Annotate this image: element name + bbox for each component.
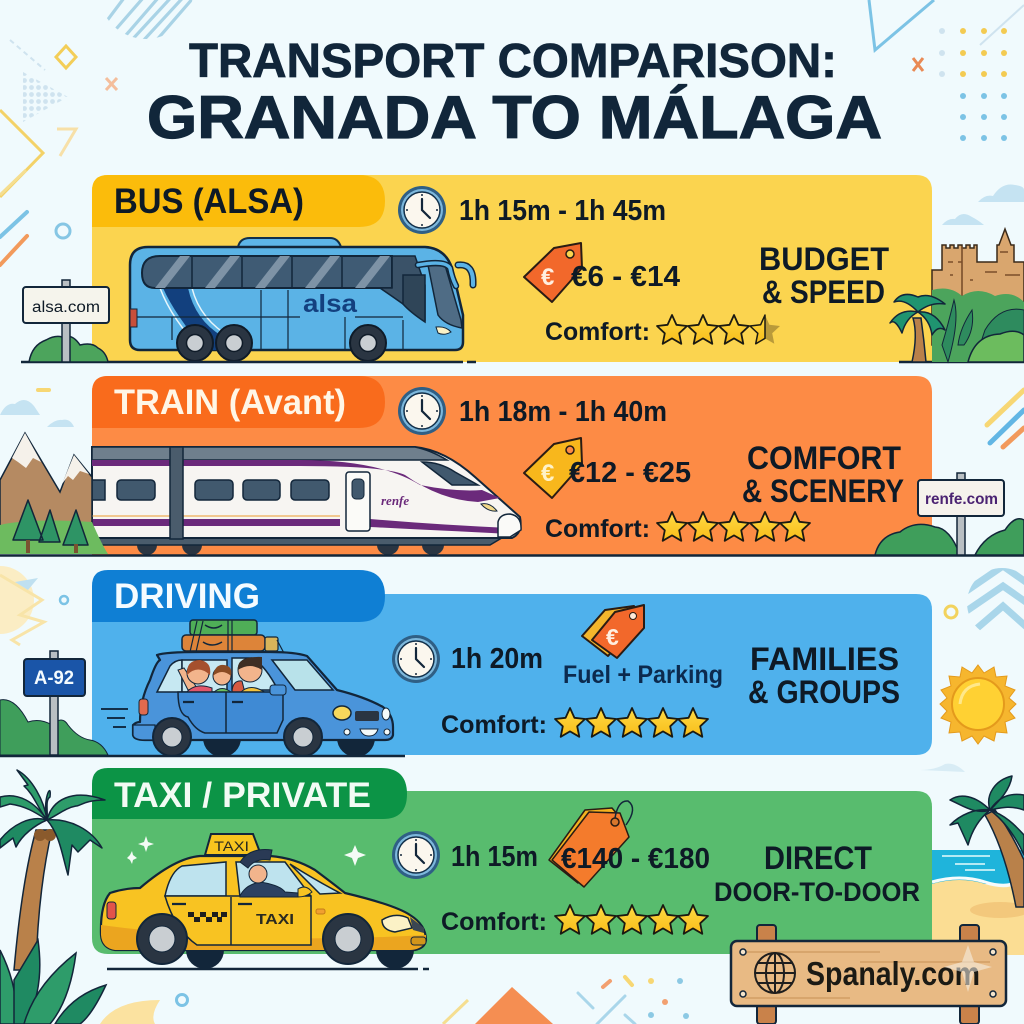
train illustration: renfe (381, 493, 409, 508)
header: driving: DRIVING (114, 577, 260, 616)
best for: & SCENERY (742, 473, 904, 509)
header: driving (92, 570, 385, 622)
decorative shapes: bottom (176, 977, 689, 1024)
scenery: bottom-left leaves (0, 940, 160, 1024)
best for: DIRECT (764, 840, 872, 876)
bus illustration: alsa (303, 290, 358, 318)
clouds: left (0, 388, 74, 427)
best for: DOOR-TO-DOOR (714, 877, 920, 907)
panel background (92, 791, 932, 954)
taxi illustration: TAXI (214, 838, 249, 854)
icon: clock (398, 186, 446, 234)
panel: taxi (92, 768, 932, 954)
duration: 1h 18m - 1h 40m (459, 396, 667, 428)
road sign: alsa.com: alsa.com (32, 299, 100, 316)
decorative shapes: top left (0, 0, 200, 265)
duration: 1h 15m (451, 841, 538, 873)
header: train (92, 376, 385, 428)
comfort rating (545, 315, 780, 346)
icon: price tags (582, 605, 644, 658)
bus illustration (130, 238, 473, 361)
taxi illustration (101, 834, 426, 969)
panel background (92, 594, 932, 755)
title: GRANADA TO MÁLAGA (147, 84, 882, 151)
comfort rating (441, 708, 708, 739)
ground line: bus (21, 361, 1024, 363)
icon: globe (755, 953, 795, 993)
sparkle (944, 945, 992, 992)
header: taxi (92, 768, 407, 819)
price: €6 - €14 (571, 261, 680, 293)
ground line: train (0, 554, 1024, 557)
best for: & SPEED (762, 274, 885, 310)
train illustration (92, 447, 521, 555)
panel: train (92, 376, 932, 555)
taxi illustration: TAXI (256, 911, 294, 928)
icon: clock (398, 387, 446, 435)
best for (714, 840, 920, 907)
icon: price tag: € (541, 460, 554, 487)
icon: price tags: € (606, 624, 619, 650)
panel: driving (92, 570, 932, 755)
duration: 1h 20m (451, 643, 543, 675)
scenery: Alhambra and palm (890, 229, 1024, 362)
scenery: mountains (0, 433, 108, 554)
scenery: right palm (950, 776, 1024, 907)
title: TRANSPORT COMPARISON: (189, 35, 837, 88)
road sign: A-92: A-92 (34, 668, 74, 689)
ground line: driving (0, 755, 405, 757)
header: train: TRAIN (Avant) (114, 383, 346, 422)
icon: price tags (549, 801, 633, 887)
car illustration (101, 620, 393, 757)
road sign: alsa.com (23, 280, 109, 362)
decorative sun: left faded (0, 566, 44, 645)
luggage (182, 620, 285, 655)
road sign: renfe.com (875, 473, 1024, 555)
duration: 1h 15m - 1h 45m (459, 195, 666, 227)
comfort rating: Comfort: (545, 515, 650, 543)
header: taxi: TAXI / PRIVATE (114, 776, 371, 815)
decorative lines: right (987, 390, 1024, 447)
best for: BUDGET (759, 241, 889, 277)
best for: FAMILIES (750, 641, 899, 677)
comfort rating (545, 512, 810, 543)
road sign: A-92 (0, 651, 108, 755)
wooden sign: Spanaly.com (731, 925, 1006, 1024)
website: Spanaly.com (806, 955, 980, 992)
title (147, 35, 882, 151)
decorative shapes: top right (869, 0, 1024, 141)
header: bus (92, 175, 385, 227)
icon: price tag: € (541, 264, 554, 291)
road sign: renfe.com: renfe.com (925, 491, 998, 508)
speed lines (101, 709, 128, 727)
comfort rating: Comfort: (441, 711, 547, 739)
icon: price tag (524, 243, 582, 302)
panel background (92, 175, 932, 362)
icon: clock (392, 635, 440, 683)
comfort rating: Comfort: (545, 318, 650, 346)
cost: Fuel + Parking (563, 661, 723, 689)
best for (742, 440, 904, 509)
icon: price tag (524, 438, 582, 498)
comfort rating: Comfort: (441, 908, 547, 936)
header: bus: BUS (ALSA) (114, 182, 304, 221)
panel background (92, 376, 932, 555)
best for: & GROUPS (748, 674, 900, 710)
clouds: top right (942, 184, 1024, 225)
comfort rating (441, 905, 708, 936)
ground line: taxi (107, 968, 429, 970)
decorative shapes: right of driving (60, 566, 1024, 772)
family (178, 657, 266, 693)
panel: bus (92, 175, 932, 362)
icon: clock (392, 831, 440, 879)
scenery: left palm (0, 770, 105, 970)
price: €12 - €25 (569, 457, 691, 489)
price: €140 - €180 (561, 843, 710, 875)
icon: sun (940, 665, 1016, 744)
best for (759, 241, 889, 310)
best for (748, 641, 900, 710)
scenery: beach (932, 850, 1024, 955)
sparkles (127, 836, 366, 866)
best for: COMFORT (747, 440, 901, 476)
